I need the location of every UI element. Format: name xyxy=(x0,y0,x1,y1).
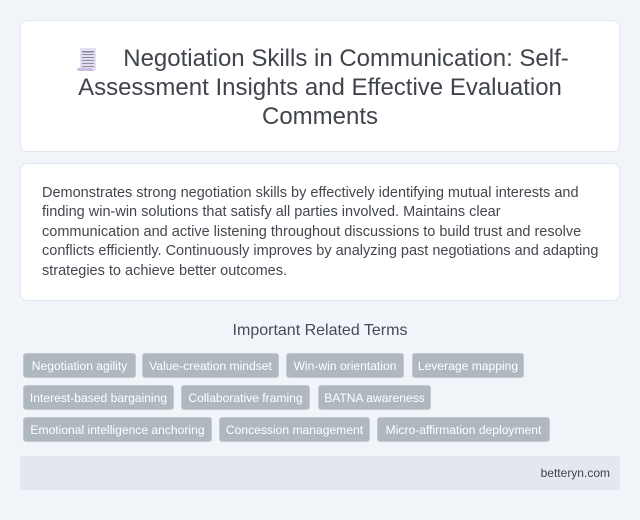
title line 3: Comments xyxy=(262,103,378,130)
description line 3: communication and active listening throughout discussions to build trust and resolve xyxy=(42,224,581,240)
description line 5: strategies to achieve better outcomes. xyxy=(42,263,287,279)
description line 1: Demonstrates strong negotiation skills by effectively identifying mutual interests and xyxy=(42,185,579,201)
description line 2: finding win-win solutions that satisfy all parties involved. Maintains clear xyxy=(42,204,501,220)
tag: Leverage mapping xyxy=(418,359,518,373)
tag: Emotional intelligence anchoring xyxy=(30,423,205,437)
panel: title card xyxy=(20,20,620,152)
footer bar xyxy=(20,456,620,490)
tag: Concession management xyxy=(226,423,363,437)
tag: Micro-affirmation deployment xyxy=(386,423,541,437)
heading: important related terms: Important Related Terms xyxy=(233,322,407,339)
tag xyxy=(23,417,212,442)
tag xyxy=(23,353,136,378)
tag: BATNA awareness xyxy=(324,391,425,405)
tag group xyxy=(23,353,550,442)
footer site name: betteryn.com xyxy=(541,466,610,480)
tag xyxy=(181,385,310,410)
icon: document scroll xyxy=(77,48,96,71)
tag: Collaborative framing xyxy=(188,391,303,405)
tag xyxy=(286,353,404,378)
tag xyxy=(412,353,524,378)
panel: description card xyxy=(20,163,620,301)
title line 1: Negotiation Skills in Communication: Self- xyxy=(123,45,569,72)
tag: Interest-based bargaining xyxy=(30,391,167,405)
tag xyxy=(318,385,431,410)
tag: Win-win orientation xyxy=(294,359,396,373)
title line 2: Assessment Insights and Effective Evaluation xyxy=(78,74,562,101)
tag xyxy=(142,353,279,378)
tag xyxy=(377,417,550,442)
description line 4: conflicts efficiently. Continuously improves by analyzing past negotiations and adapting xyxy=(42,243,598,259)
tag: Value-creation mindset xyxy=(149,359,272,373)
tag xyxy=(23,385,174,410)
tag xyxy=(219,417,370,442)
tag: Negotiation agility xyxy=(32,359,127,373)
